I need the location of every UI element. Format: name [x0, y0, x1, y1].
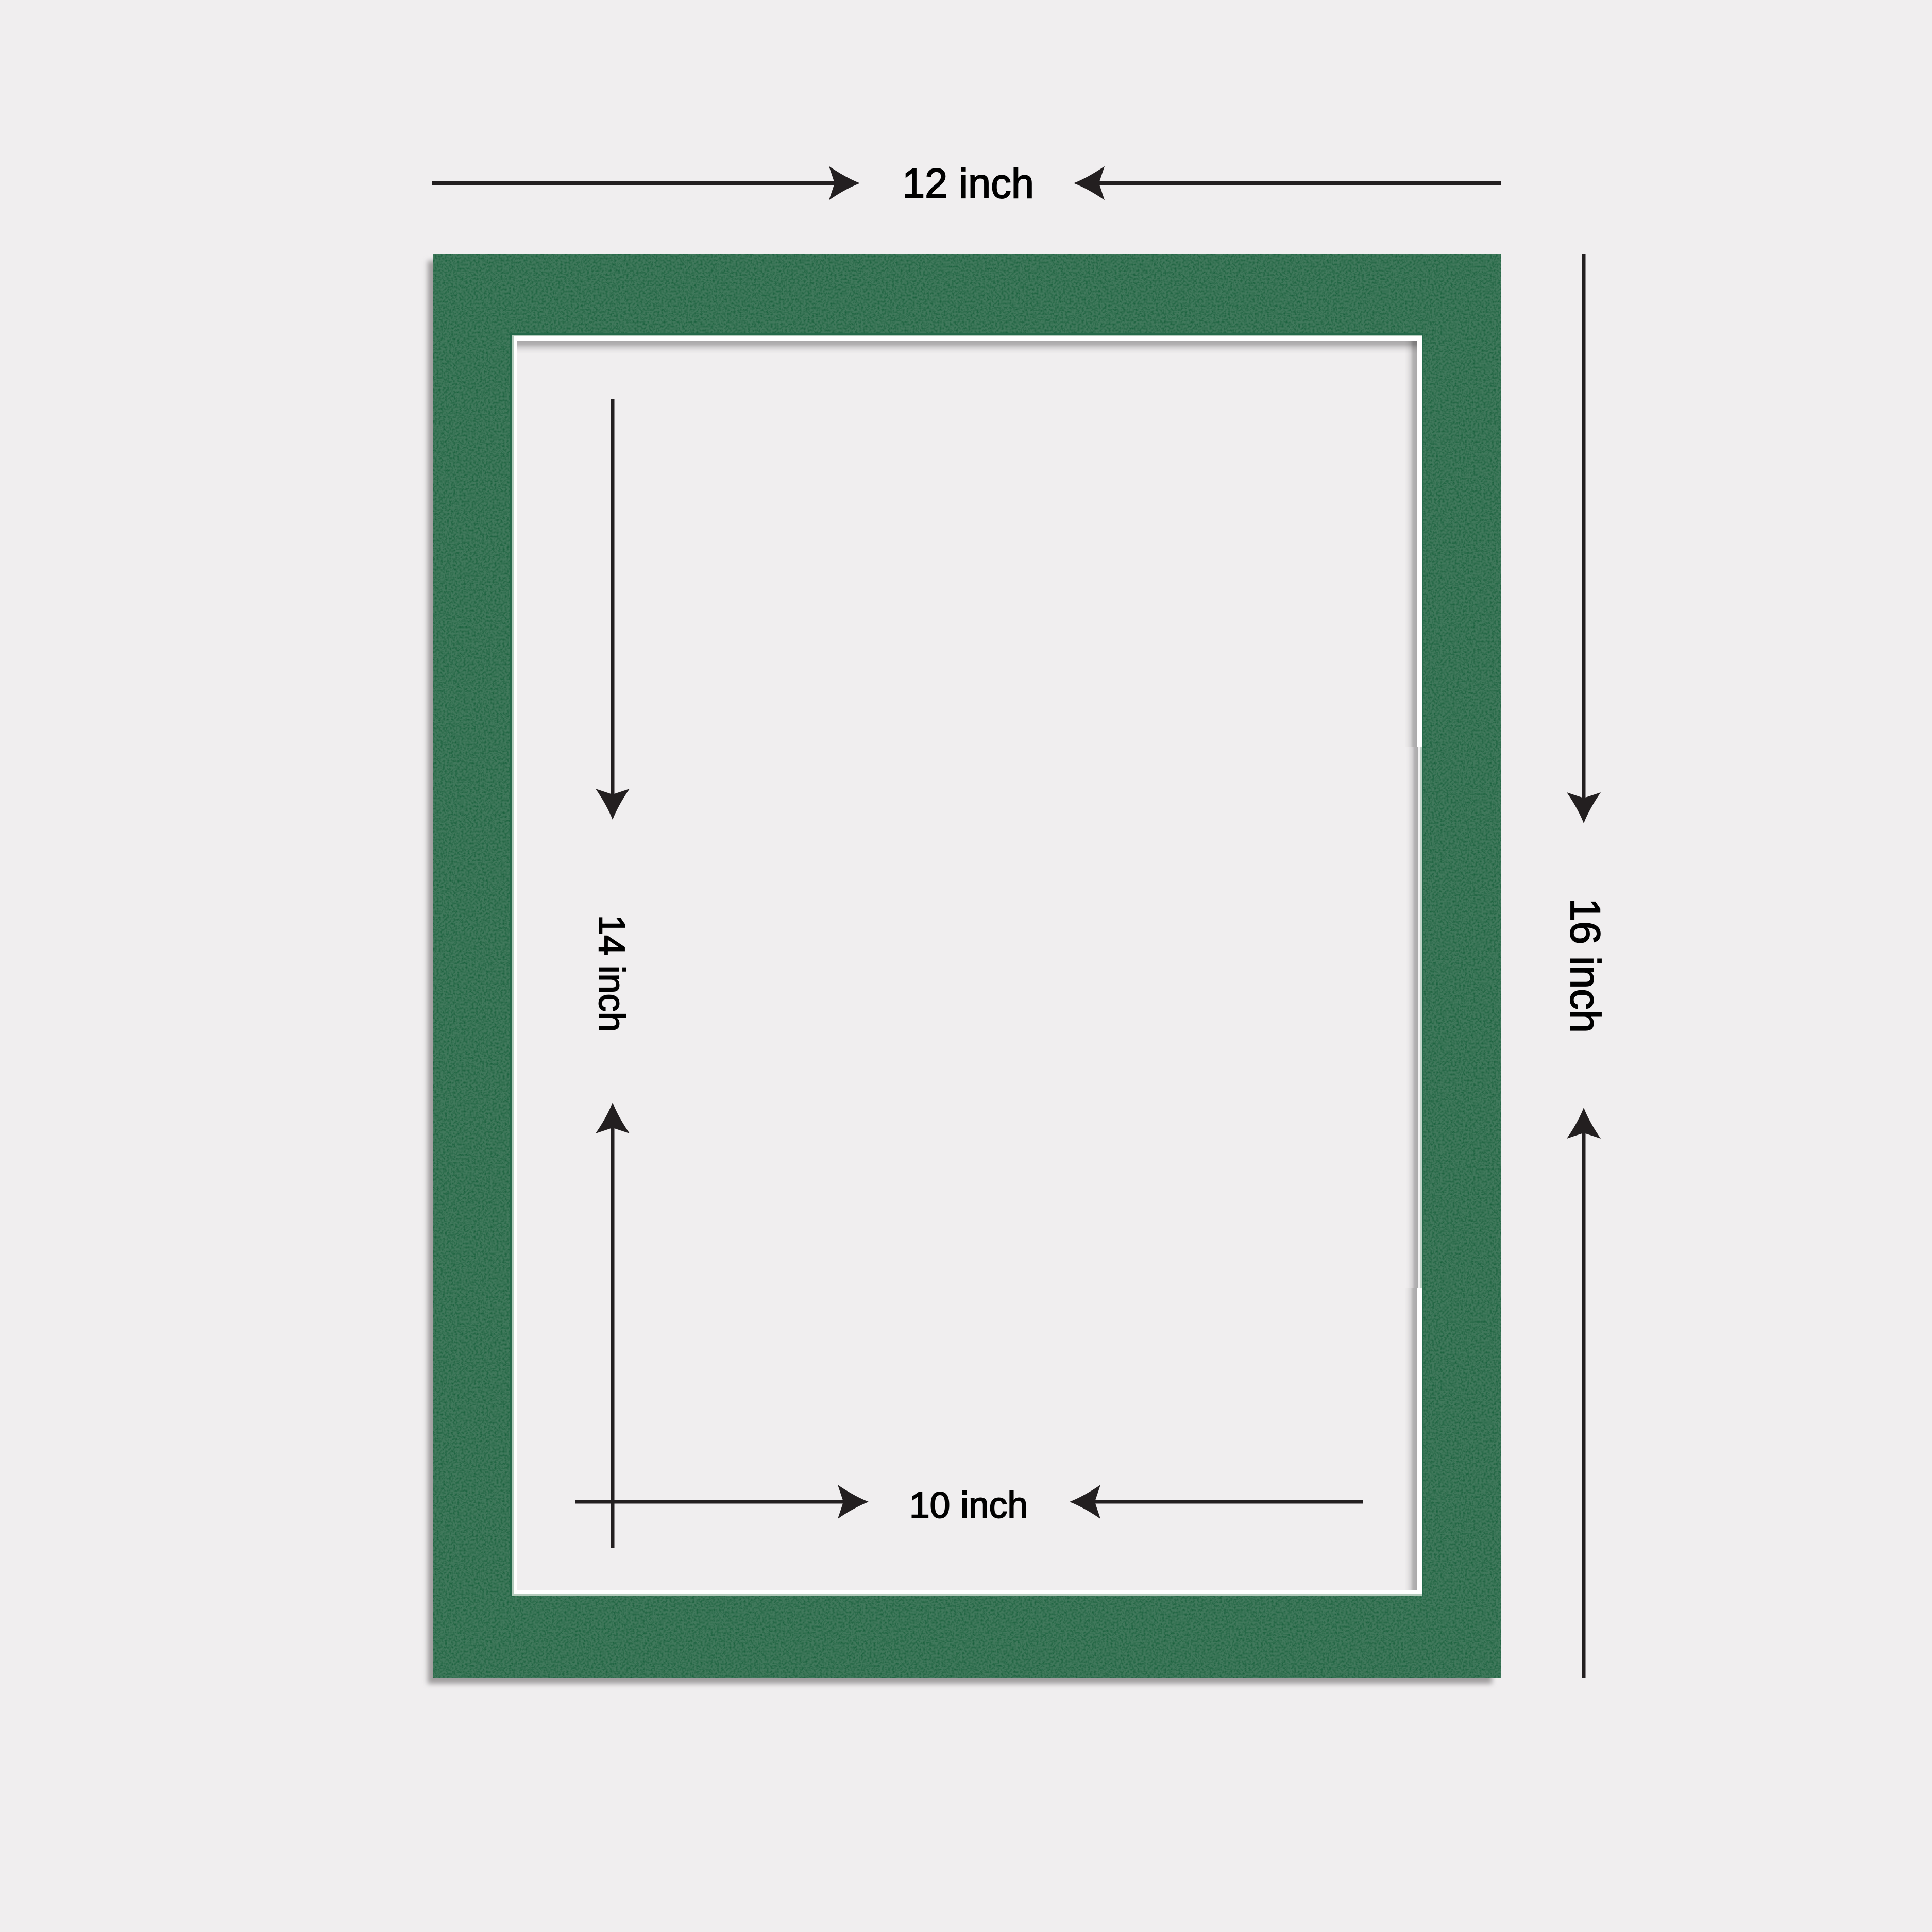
window inner shadow: right upper: [1404, 341, 1417, 754]
label: 12 inch: 12 inch: [902, 160, 1034, 207]
arrow: 14 inch top: [596, 399, 630, 820]
panel: green mat board: [428, 254, 1501, 1684]
arrow: 16 inch top: [1567, 254, 1601, 823]
mat board face: [433, 254, 1501, 1678]
arrow: 10 inch left: [575, 1485, 869, 1519]
outer drop shadow: [428, 261, 1492, 1684]
mat board paper grain: [433, 254, 1501, 1678]
arrow: 16 inch bottom: [1567, 1108, 1601, 1678]
label: 10 inch: 10 inch: [909, 1485, 1028, 1526]
window inner shadow: top: [517, 341, 1417, 354]
window inner shadow: right lower: [1404, 1283, 1417, 1590]
label: 14 inch: 14 inch: [591, 915, 632, 1032]
window edge: right middle section: [1404, 747, 1422, 1288]
arrow: 14 inch bottom: [596, 1103, 630, 1548]
label: 16 inch: 16 inch: [1562, 898, 1608, 1033]
arrow: 12 inch right: [1074, 166, 1501, 200]
window bevel: [510, 333, 1423, 1597]
arrow: 10 inch right: [1070, 1485, 1363, 1519]
arrow: 12 inch left: [432, 166, 860, 200]
